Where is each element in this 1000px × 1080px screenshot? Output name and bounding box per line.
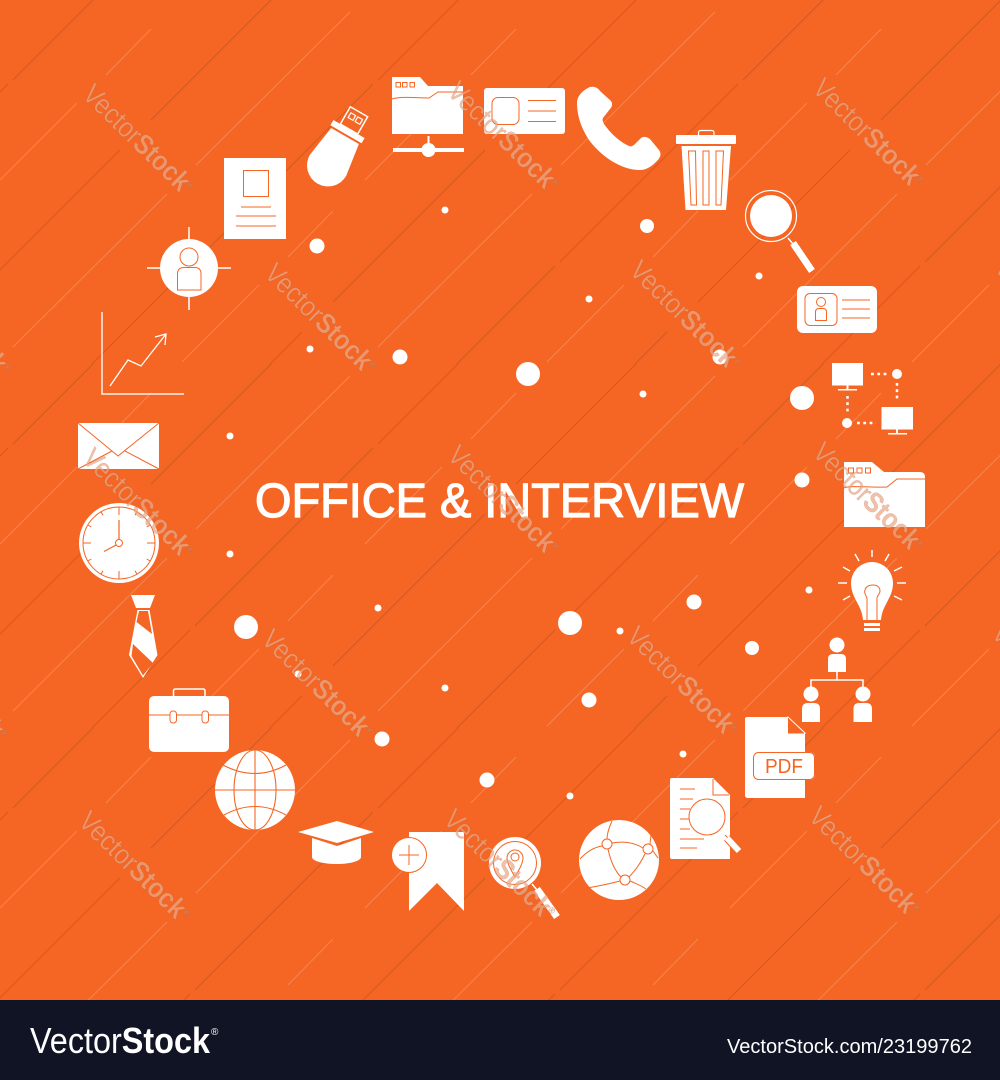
watermark pattern: [0, 72, 1000, 928]
watermark pattern: ®: [911, 902, 923, 913]
watermark pattern: VectorStock: [256, 623, 382, 748]
watermark pattern: VectorStock: [442, 439, 568, 564]
watermark pattern: ®: [2, 362, 14, 373]
watermark pattern: ®: [185, 180, 197, 191]
scattered dots: [226, 206, 814, 800]
watermark pattern: VectorStock: [621, 620, 747, 745]
icon: light bulb: [838, 550, 906, 631]
icon: resume document: [224, 158, 286, 239]
watermark pattern: ®: [915, 538, 927, 549]
footer image id: VectorStock.com/23199762: [727, 1036, 972, 1058]
watermark pattern: VectorStock: [77, 442, 203, 567]
icon: connected computers: [832, 363, 913, 434]
icon: business card: [484, 88, 565, 134]
title: OFFICE & INTERVIEW: [255, 475, 745, 528]
icon: candidate target: [147, 227, 231, 310]
watermark pattern: VectorStock: [624, 254, 750, 379]
watermark pattern: ®: [546, 905, 558, 916]
watermark pattern: ®: [181, 907, 193, 918]
watermark pattern: ®: [185, 544, 197, 555]
icon: envelope: [78, 423, 159, 469]
watermark pattern: VectorStock: [77, 78, 203, 203]
watermark pattern: VectorStock: [803, 800, 929, 925]
watermark pattern: ®: [364, 725, 376, 736]
icon: id card: [797, 286, 877, 333]
icon: growth chart: [102, 312, 184, 394]
registered mark: ®: [211, 1027, 219, 1038]
watermark pattern: ®: [729, 722, 741, 733]
icon: magnifying glass: [746, 190, 812, 271]
footer logo: VectorStock: [30, 1020, 211, 1061]
watermark pattern: VectorStock: [807, 436, 933, 561]
icon: network folder: [392, 77, 464, 157]
icon: folder: [844, 462, 925, 527]
watermark pattern: ®: [550, 177, 562, 188]
watermark pattern: ®: [915, 174, 927, 185]
icon: graduation cap: [298, 821, 374, 864]
watermark pattern: ®: [550, 541, 562, 552]
watermark pattern: VectorStock: [807, 72, 933, 197]
icon: document search: [670, 778, 739, 859]
icon: necktie: [129, 595, 158, 678]
watermark pattern: VectorStock: [438, 803, 564, 928]
watermark pattern: ®: [367, 359, 379, 370]
icon: trash can: [676, 130, 736, 210]
icon: briefcase: [149, 689, 229, 752]
footer bar: [0, 1000, 1000, 1080]
icon: location search: [489, 837, 557, 917]
icon: network sphere: [579, 820, 659, 900]
watermark pattern: ®: [732, 356, 744, 367]
watermark pattern: VectorStock: [259, 257, 385, 382]
icon: wall clock: [79, 503, 159, 583]
watermark pattern: VectorStock: [442, 75, 568, 200]
icon: pdf file: [745, 717, 815, 798]
icon: bookmark add: [392, 832, 464, 911]
icon: usb drive: [299, 101, 377, 194]
icon: telephone: [577, 87, 660, 170]
icon: globe: [215, 750, 295, 830]
icon: pdf file: PDF: [765, 756, 803, 778]
watermark pattern: VectorStock: [73, 805, 199, 930]
icon: hierarchy chart: [802, 638, 872, 722]
